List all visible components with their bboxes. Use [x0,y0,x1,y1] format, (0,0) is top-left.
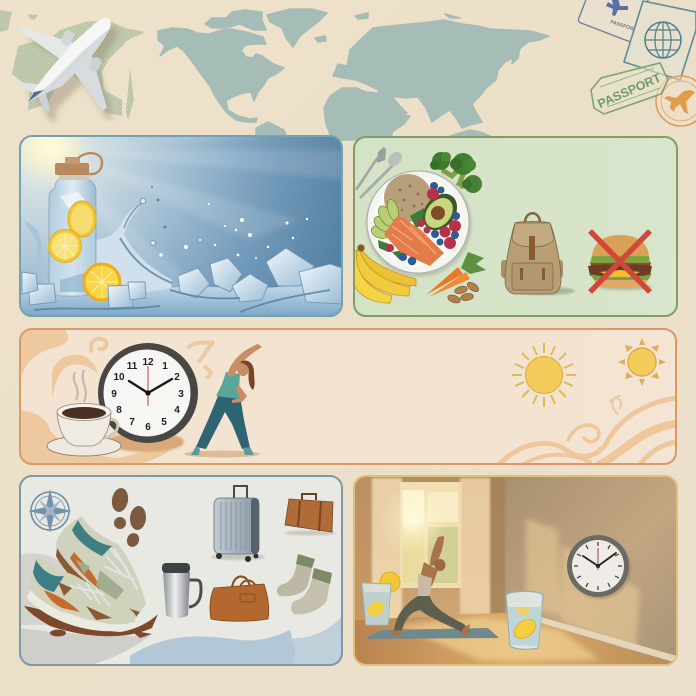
world map [158,9,549,140]
continent: Africa [324,88,410,140]
icon: wall clock: 7 [129,417,135,428]
lemon half [82,262,122,302]
icon: travel mug [162,563,201,618]
icon: bananas [349,244,416,303]
curtains [354,478,505,620]
floor [354,613,677,665]
back shoe [56,516,146,617]
right orange swirls [500,396,676,464]
wings and tail [19,27,76,62]
torso [216,372,240,399]
panel background [20,476,342,665]
Japan and islands [315,13,520,140]
icon: briefcase [284,494,336,536]
light on floor [395,617,600,660]
front shoe [27,558,136,631]
icon: small sun [618,338,666,386]
wave decoration [20,553,342,665]
continent: Greenland [267,9,327,47]
water splash [24,202,172,300]
icon: large sun [512,343,576,407]
head [237,362,249,376]
engines [60,29,76,47]
arctic islands [205,10,266,30]
panel: daily routine [20,329,676,464]
panel border: sunlit yoga room [354,476,677,665]
stamp: blue passport: PASSPORT [609,19,637,33]
icon: lemon water glass large [506,591,543,649]
panel background sky [21,137,341,290]
droplets [140,186,308,259]
lemon slices in bottle [68,201,96,237]
baseboard [541,617,677,663]
panel border: hydration [20,136,342,316]
figure: yoga pose [391,536,470,635]
continent: North America [158,28,284,122]
water ripples [34,290,330,312]
salmon [384,215,444,266]
panel border: nutrition [354,137,677,316]
icon: carrots and almonds [426,252,486,305]
stamp: passport book with globe [624,1,696,80]
icy water foreground [21,284,341,315]
berries [399,182,460,265]
icon: leather duffel [210,576,269,621]
icon: compass [28,489,72,533]
panel: hydration [21,137,341,315]
stamp: green PASSPORT hexagon: PASSPORT [596,71,664,111]
panel border: daily routine [20,329,676,464]
icon: wall clock: 1 [162,361,168,372]
icon: muddy shoes [24,516,158,638]
icon: wall clock: 9 [111,389,117,400]
raised arm [227,344,262,376]
quinoa [384,174,432,222]
icon: wall clock: 4 [174,405,180,416]
icon: wall clock [98,343,198,452]
stamp: blue passport [578,0,652,42]
icon: food plate [366,171,472,277]
icon: wall clock: 2 [174,372,180,383]
legs [196,396,250,449]
avocado slices [370,198,399,239]
icon: wall clock: 11 [127,361,138,372]
travel stamps [578,0,696,126]
icon: wool socks [277,554,332,614]
icon: toy airplane [16,18,119,123]
icon: wall clock: 12 [142,357,154,368]
icon: crossed-out burger [588,231,652,292]
steam [74,370,86,402]
panel: sunlit yoga room [354,476,677,665]
mud splatter [24,606,158,636]
icon: wall clock: 10 [113,372,125,383]
wall light patch [526,518,640,652]
icon: wall clock: 6 [145,422,151,433]
plane shadow [25,27,119,123]
panel: nutrition [349,137,677,316]
avocado [423,194,458,230]
yoga mat [365,628,499,639]
icon: wall clock: 3 [178,389,184,400]
bottle cap [59,174,89,180]
icon: fork and spoon [356,147,405,198]
panel background [354,137,677,316]
right wall [504,476,677,665]
icon: wall clock: 5 [161,417,167,428]
ice cubes [22,248,342,308]
icon: backpack [501,213,575,295]
left orange swirls [20,329,182,464]
icon: broccoli [430,152,482,193]
icon: coffee cup [47,370,121,456]
continent: Eurasia [333,20,549,128]
icon: wall clock: 8 [116,405,122,416]
panel border: travel gear [20,476,342,665]
water bottle [48,153,102,296]
sun rays [105,150,341,288]
panel: travel gear [20,476,342,665]
icon: rolling suitcase [211,486,265,562]
continent: South America [256,122,288,140]
left wall [354,476,504,621]
icon: wall clock [567,535,631,599]
window [378,482,462,588]
panel background [109,330,675,463]
stamp: green PASSPORT hexagon [591,63,668,114]
stamp: orange round plane [656,76,696,126]
sun glow [32,137,80,176]
icon: lemon water glass small [362,572,400,625]
fuselage [28,18,111,102]
shoes [191,446,254,455]
faded hatched map behind plane [0,10,145,120]
hip arm [232,384,247,403]
figure: stretching woman [184,344,262,458]
icon: muddy footprints [110,487,147,549]
greens [378,208,428,260]
